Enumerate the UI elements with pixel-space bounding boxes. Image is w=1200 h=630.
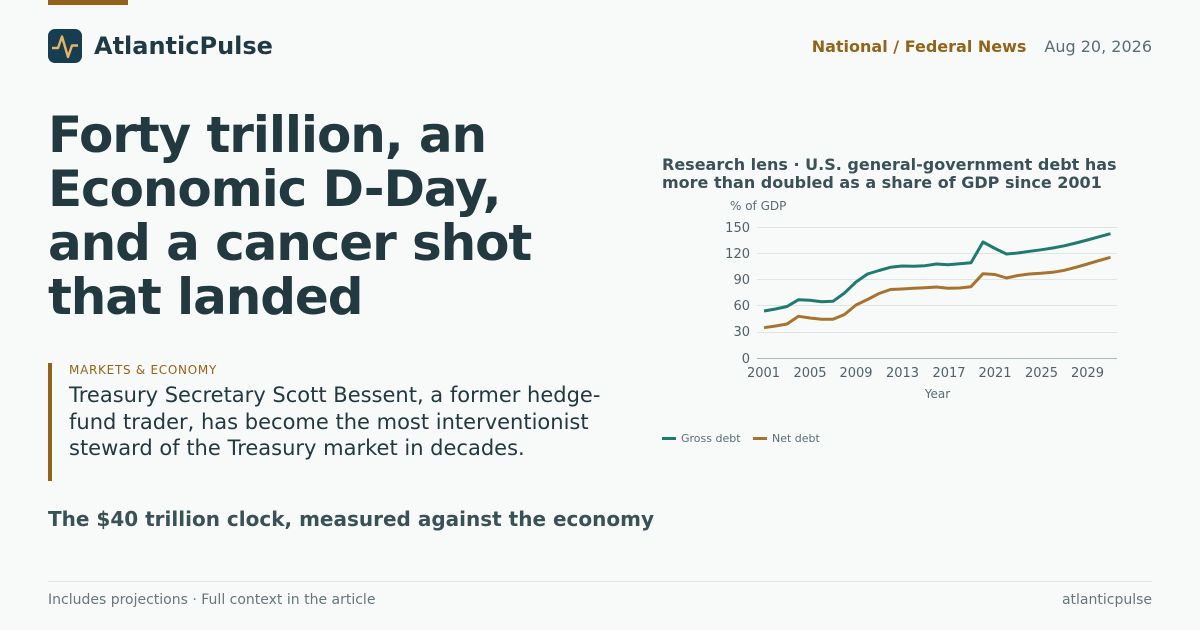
legend: Gross debt bbox=[681, 432, 741, 445]
headline: Forty trillion, an bbox=[48, 106, 486, 164]
chart title: more than doubled as a share of GDP since 2001 bbox=[662, 172, 1102, 192]
category and date: National / Federal News Aug 20, 2026 bbox=[812, 37, 1152, 56]
gross debt line bbox=[764, 234, 1110, 311]
legend: Net debt bbox=[772, 432, 821, 445]
callout bbox=[48, 363, 612, 481]
x axis labels bbox=[747, 366, 1104, 381]
headline bbox=[48, 106, 532, 326]
headline: Economic D-Day, bbox=[48, 160, 500, 218]
summary text: fund trader, has become the most interventionist bbox=[69, 410, 589, 434]
y axis labels: 0 bbox=[742, 352, 750, 367]
x axis labels: 2001 bbox=[747, 366, 780, 381]
chart title bbox=[662, 154, 1117, 192]
headline: that landed bbox=[48, 268, 362, 326]
x axis labels: 2017 bbox=[932, 366, 966, 381]
x axis labels: 2029 bbox=[1071, 366, 1104, 381]
x axis labels: 2021 bbox=[978, 366, 1012, 381]
net debt line bbox=[764, 257, 1110, 328]
summary text: steward of the Treasury market in decades. bbox=[69, 436, 525, 460]
icon: pulse logo bbox=[48, 29, 82, 63]
kicker: MARKETS & ECONOMY bbox=[69, 363, 217, 377]
y axis labels: 150 bbox=[725, 221, 750, 236]
summary text bbox=[68, 383, 600, 460]
accent bar bbox=[48, 0, 128, 5]
y axis labels: 90 bbox=[733, 273, 750, 288]
y axis labels: 30 bbox=[733, 325, 750, 340]
summary text: Treasury Secretary Scott Bessent, a former hedge- bbox=[69, 383, 600, 407]
x axis labels: 2013 bbox=[886, 366, 919, 381]
headline: and a cancer shot bbox=[48, 214, 531, 272]
footer bbox=[48, 581, 1152, 618]
footer source: atlanticpulse bbox=[1062, 592, 1152, 608]
line chart bbox=[662, 199, 1117, 445]
subheading: The $40 trillion clock, measured against the economy bbox=[48, 507, 654, 531]
x axis labels: 2025 bbox=[1025, 366, 1058, 381]
chart title: Research lens · U.S. general-government debt has bbox=[662, 154, 1117, 174]
y axis title: % of GDP bbox=[730, 199, 786, 213]
y axis labels bbox=[725, 221, 750, 367]
y axis labels: 60 bbox=[733, 299, 750, 314]
footer note: Includes projections · Full context in the article bbox=[48, 592, 375, 608]
x axis title: Year bbox=[924, 387, 950, 401]
legend bbox=[662, 432, 821, 445]
x axis labels: 2005 bbox=[793, 366, 827, 381]
brand name: AtlanticPulse bbox=[94, 32, 273, 60]
y axis labels: 120 bbox=[725, 247, 750, 262]
x axis labels: 2009 bbox=[839, 366, 873, 381]
brand bbox=[48, 29, 273, 63]
